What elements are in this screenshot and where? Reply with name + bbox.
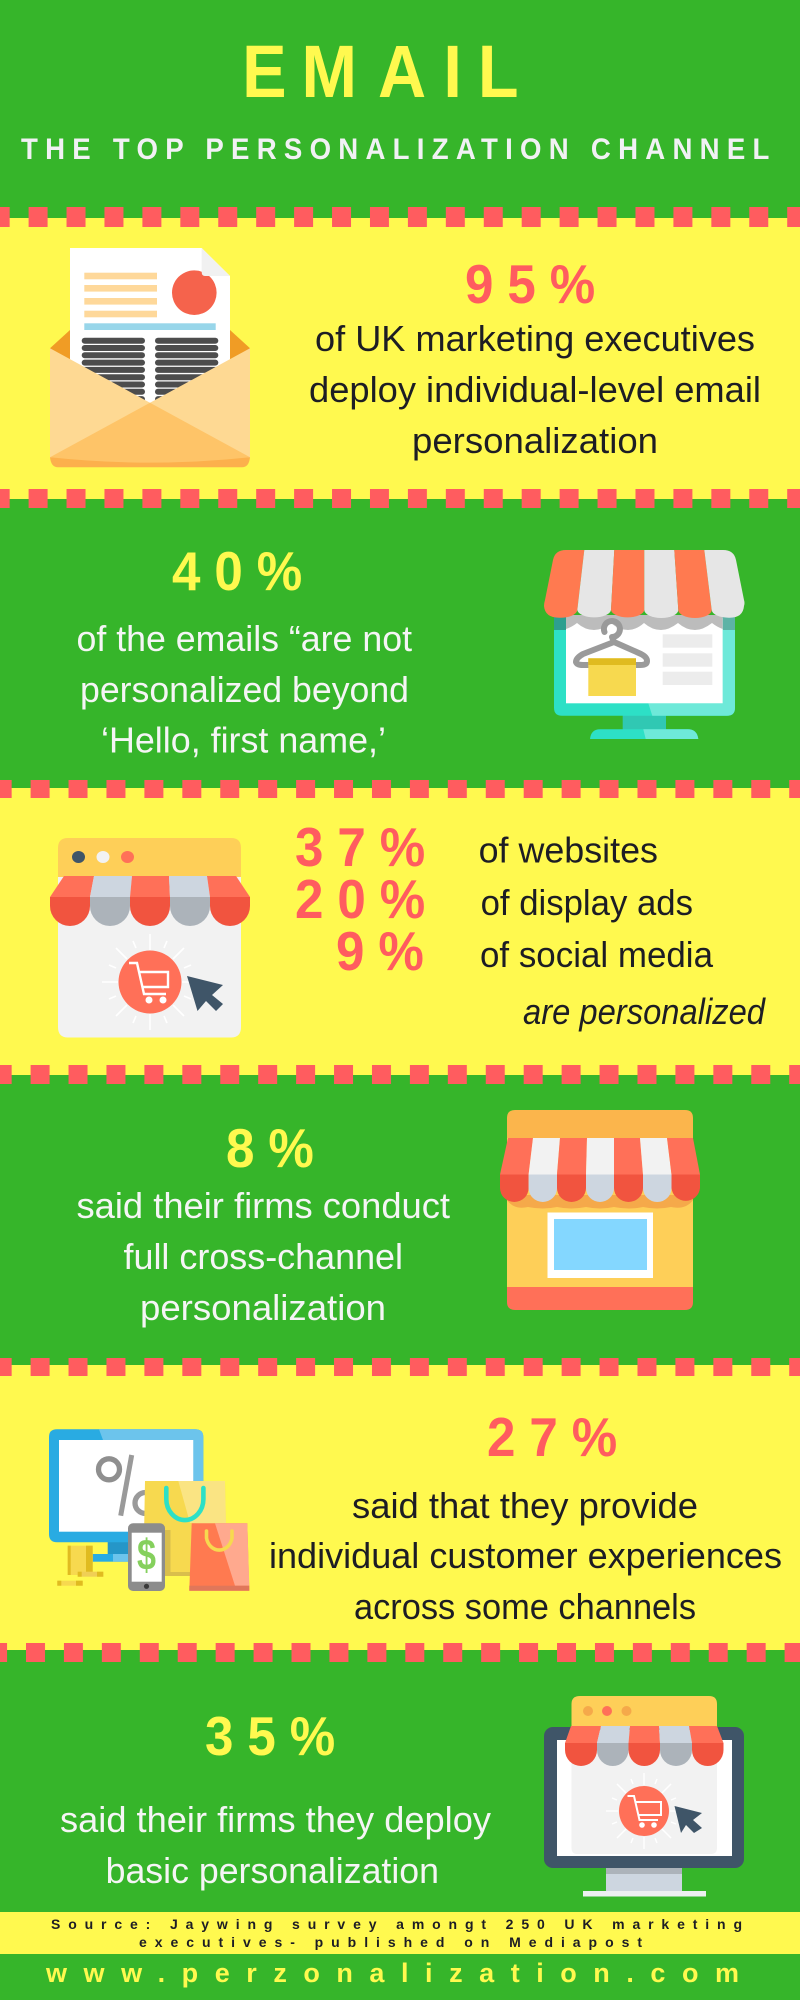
source note: executives- published on Mediapost	[139, 1934, 642, 1950]
text: 8% description: personalization	[140, 1287, 386, 1328]
icon: clothing store monitor	[544, 550, 744, 739]
text: 95% description: personalization	[412, 420, 658, 461]
text: 40% description	[76, 618, 412, 760]
stat: 9%: 9%	[336, 921, 438, 982]
panel: 40% stat	[76, 541, 744, 760]
text: 35% description: said their firms they deploy	[60, 1799, 491, 1840]
stat: 37%: 37%	[295, 817, 439, 878]
stat: 20%: 20%	[295, 869, 439, 930]
text: 40% description: of the emails “are not	[76, 618, 412, 659]
panel: 37/20/9% stats	[50, 817, 766, 1038]
icon: storefront	[500, 1110, 700, 1310]
text: 8% description	[76, 1185, 450, 1328]
stat: 35%: 35%	[205, 1706, 349, 1767]
icon: online store with cart	[50, 838, 250, 1038]
text: channels list	[479, 830, 766, 1032]
text: 95% description	[309, 318, 761, 461]
text: 8% description: full cross-channel	[124, 1236, 403, 1277]
text: 95% description: of UK marketing executives	[315, 318, 755, 359]
subtitle: THE TOP PERSONALIZATION CHANNEL	[21, 133, 777, 166]
text: 27% description: across some channels	[354, 1586, 696, 1627]
title: EMAIL	[242, 30, 519, 113]
stat: 40%: 40%	[172, 541, 316, 602]
source note: Source: Jaywing survey amongt 250 UK marketing	[51, 1916, 742, 1932]
icon: monitor with shopping bags: $	[137, 1531, 156, 1580]
panel: 8% stat	[76, 1110, 700, 1328]
text: 95% description: deploy individual-level email	[309, 369, 761, 410]
panel: 35% stat	[60, 1696, 744, 1896]
text: 35% description: basic personalization	[106, 1850, 439, 1891]
stat: 27%: 27%	[487, 1407, 631, 1468]
text: 27% description: individual customer experiences	[269, 1535, 782, 1576]
stat: 95%: 95%	[465, 254, 609, 315]
panel: 27% stat	[49, 1407, 782, 1627]
icon: monitor with shopping bags	[49, 1429, 249, 1591]
text: channels list: of display ads	[481, 882, 693, 923]
text: channels list: of websites	[479, 830, 658, 870]
stat: 8%: 8%	[226, 1118, 328, 1179]
text: 27% description	[269, 1485, 782, 1627]
text: channels list: of social media	[480, 934, 714, 975]
text: 27% description: said that they provide	[352, 1485, 698, 1526]
text: channels list: are personalized	[523, 991, 766, 1032]
text: 40% description: personalized beyond	[80, 669, 409, 710]
text: 35% description	[60, 1799, 491, 1891]
icon: store in desktop monitor	[544, 1696, 744, 1896]
text: 40% description: ‘Hello, first name,’	[101, 720, 386, 760]
source note	[51, 1916, 742, 1950]
icon: envelope with document	[50, 248, 250, 467]
text: 8% description: said their firms conduct	[76, 1185, 450, 1226]
footer url: www.perzonalization.com	[45, 1958, 739, 1988]
panel: 95% stat	[50, 248, 761, 467]
